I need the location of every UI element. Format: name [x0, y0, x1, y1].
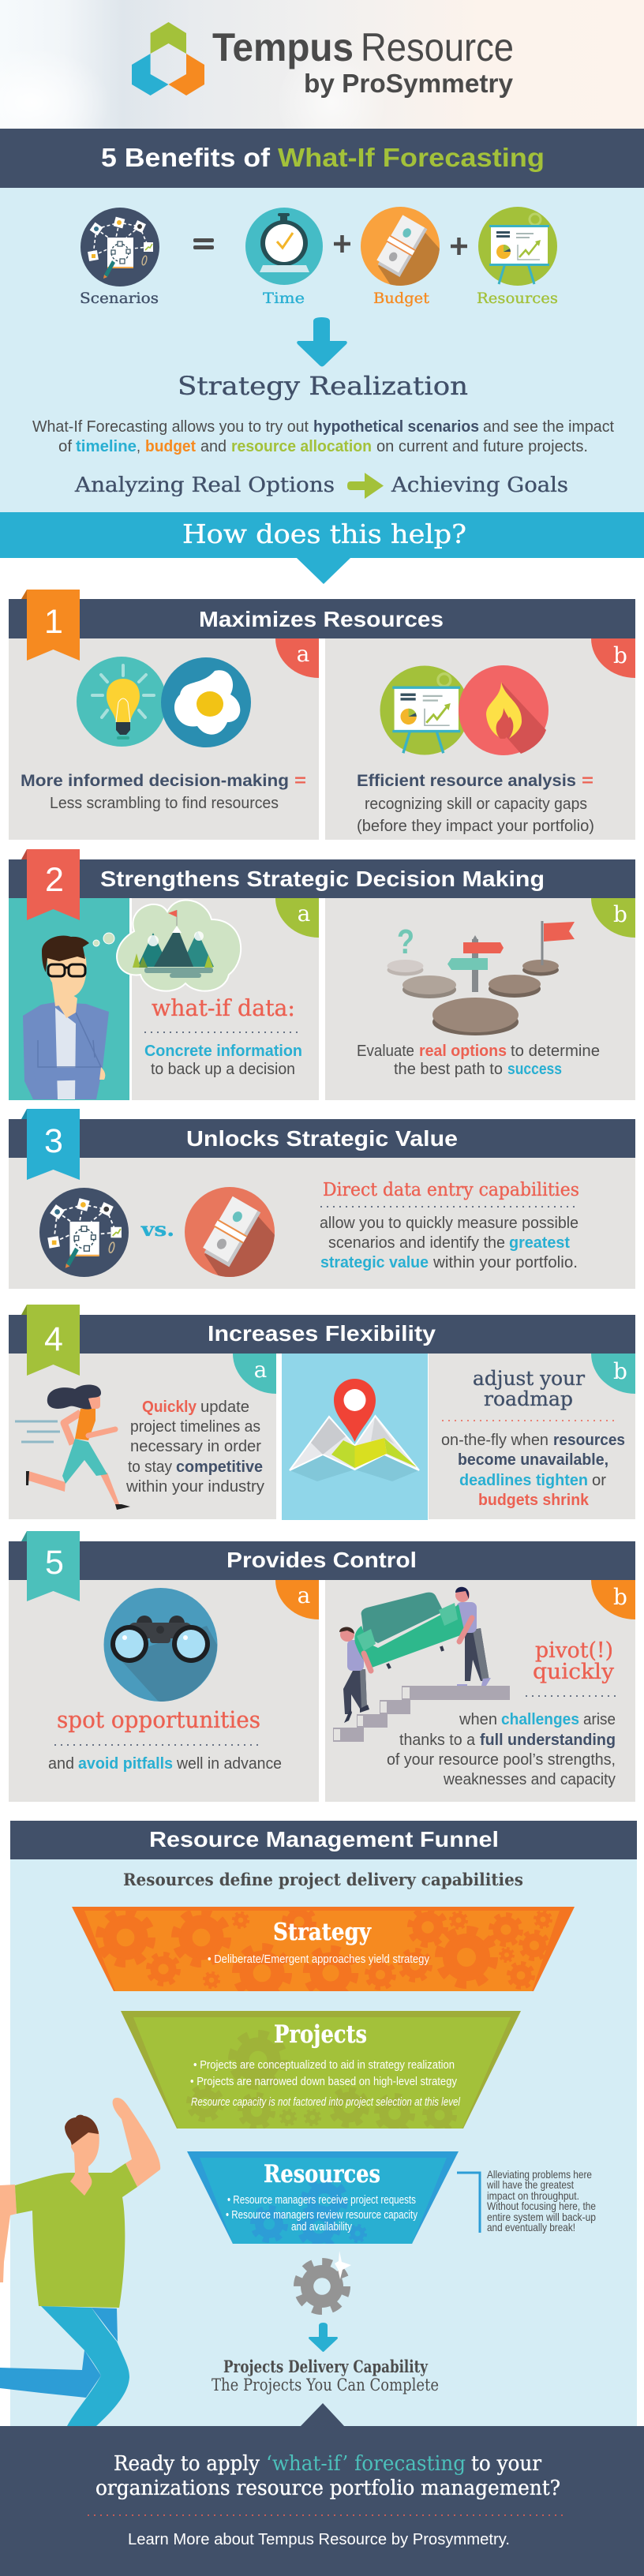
icon: fried egg	[161, 657, 251, 747]
callout: alleviating problems: Alleviating problems here	[487, 2168, 592, 2181]
icon: thought bubble with mountains	[93, 900, 241, 991]
callout: alleviating problems: will have the greatest	[486, 2178, 574, 2191]
text: panel b: full understanding	[480, 1732, 616, 1749]
label: vs: vs.	[140, 1218, 174, 1241]
section 5: provides control	[9, 1531, 635, 1802]
callout: alleviating problems: and eventually break!	[487, 2221, 575, 2233]
corner tag a	[275, 638, 319, 678]
text: panel a: to stay	[128, 1458, 172, 1476]
text: panel b: budgets shrink	[478, 1492, 590, 1509]
icon: gear with sparkle	[298, 2251, 351, 2311]
text: panel b: adjust your	[473, 1367, 585, 1390]
text: panel b: recognizing skill or capacity gaps	[365, 796, 587, 813]
banner: how does this help: How does this help?	[182, 519, 466, 549]
text: direct data entry: allow you to quickly measure possible	[320, 1215, 578, 1232]
text: panel a: spot opportunities	[57, 1706, 260, 1733]
panel a background	[9, 1354, 276, 1519]
ribbon number 3: 3	[44, 1122, 63, 1160]
funnel tier: projects: Projects	[274, 2020, 367, 2049]
funnel tier: resources: Resources	[264, 2160, 380, 2188]
text: what-if description: and see the impact	[483, 418, 614, 436]
callout: alleviating problems: Without focusing here, the	[487, 2200, 596, 2212]
panel background	[9, 1158, 635, 1289]
callout: alleviating problems: impact on throughput.	[487, 2189, 579, 2202]
section 4: increases flexibility	[9, 1305, 635, 1520]
ribbon number 4: 4	[44, 1320, 63, 1358]
text: what-if description: hypothetical scenarios	[313, 418, 479, 436]
text: panel a: More informed decision-making	[21, 772, 289, 790]
text: panel b: or	[592, 1472, 606, 1489]
section bar heading: Maximizes Resources	[199, 607, 444, 631]
arrow: green right	[347, 473, 384, 499]
corner tag a: a	[298, 1582, 310, 1608]
footer call to action	[0, 2403, 644, 2576]
section bar heading	[9, 1119, 635, 1158]
panel a background	[9, 638, 319, 840]
text: projects delivery capability: The Projects You Can Complete	[212, 2376, 439, 2394]
text: panel a: competitive	[176, 1458, 263, 1476]
panel background	[10, 1859, 637, 2428]
text: panel a: and	[48, 1755, 74, 1773]
section 2: strengthens strategic decision making	[9, 849, 635, 1100]
text: what-if data	[144, 994, 303, 1078]
text: panel b: the best path to	[394, 1061, 503, 1078]
corner tag b	[591, 1354, 635, 1394]
icon: light bulb	[77, 657, 167, 747]
icon: scenarios	[80, 208, 159, 286]
panel b background	[325, 638, 635, 840]
heading: strategy realization: Strategy Realization	[178, 371, 468, 401]
text: panel b: success	[507, 1061, 562, 1078]
text: panel a: within your industry	[125, 1478, 264, 1496]
text: what-if description: What-If Forecasting allows you to try out	[32, 418, 309, 436]
text: panel a: update	[200, 1398, 249, 1416]
formula labels: Resources	[477, 290, 558, 307]
text: what-if description: resource allocation	[231, 438, 372, 455]
corner tag b	[591, 1580, 635, 1619]
callout: alleviating problems	[457, 2168, 596, 2233]
funnel tier: resources: and availability	[291, 2220, 352, 2233]
funnel tier: resources	[187, 2151, 459, 2246]
section bar heading	[9, 1541, 635, 1580]
funnel tier: resources: • Resource managers receive project requests	[227, 2193, 416, 2207]
funnel tier: resources: • Resource managers review resource capacity	[226, 2208, 417, 2222]
icon: money stack for budget	[361, 207, 451, 298]
text: options to goals: Analyzing Real Options	[74, 474, 335, 497]
ribbon number 3	[21, 1109, 80, 1180]
section bar heading	[9, 599, 635, 638]
corner tag b: b	[613, 642, 627, 668]
corner tag a	[275, 898, 319, 938]
logo wordmark: Resource	[361, 25, 514, 69]
panel b background	[325, 1580, 635, 1802]
text: what-if description: timeline	[76, 438, 137, 455]
text: direct data entry: within your portfolio.	[432, 1254, 578, 1271]
icon: stepping stones and signpost: ?	[397, 923, 414, 961]
text: projects delivery capability: Projects Delivery Capability	[223, 2357, 429, 2376]
text: panel b: deadlines tighten	[459, 1472, 588, 1489]
section: resource management funnel	[0, 1821, 637, 2428]
section bar heading: Provides Control	[227, 1548, 417, 1572]
ribbon number 5	[21, 1531, 80, 1601]
section 1: maximizes resources	[9, 590, 635, 840]
icon: plus	[451, 238, 467, 255]
text: ready to apply: ‘what-if’ forecasting	[266, 2452, 466, 2476]
icon: flame	[459, 665, 549, 755]
icon: runner	[15, 1385, 130, 1510]
text: projects delivery capability	[212, 2357, 439, 2394]
text: panel b: become unavailable,	[458, 1451, 608, 1469]
funnel tier: projects	[121, 2011, 521, 2131]
text: options to goals	[74, 473, 568, 499]
section bar heading	[10, 1821, 637, 1859]
funnel tier: strategy	[72, 1907, 575, 1998]
banner: how does this help	[0, 512, 644, 584]
header background with logo	[0, 0, 644, 158]
corner tag a: a	[297, 641, 309, 667]
text: learn more link: Learn More about Tempus Resource by Prosymmetry.	[128, 2531, 510, 2548]
text: panel b	[357, 772, 594, 835]
corner tag b: b	[613, 1584, 627, 1610]
icon: stepping stones and signpost	[387, 921, 575, 1035]
text: direct data entry	[320, 1180, 579, 1271]
text: panel a: well in advance	[176, 1755, 282, 1773]
icon: equals sign	[193, 238, 214, 249]
text: panel b: roadmap	[484, 1387, 573, 1410]
text: what-if description: and	[200, 438, 227, 455]
panel b background	[429, 1354, 635, 1519]
icon: stopwatch for time	[245, 208, 323, 285]
text: what-if data: Concrete information	[144, 1043, 302, 1060]
text: panel a	[48, 1706, 282, 1773]
section bar heading: Resource Management Funnel	[149, 1827, 499, 1852]
text: panel b: when	[459, 1711, 497, 1728]
section bar heading	[9, 859, 635, 898]
icon: plus	[334, 235, 350, 253]
corner tag a: a	[298, 900, 310, 927]
callout: alleviating problems: entire system will back-up	[487, 2211, 596, 2223]
corner tag a: a	[254, 1357, 267, 1383]
funnel tier: strategy: • Deliberate/Emergent approaches yield strategy	[208, 1953, 429, 1966]
panel: what-if formula intro	[0, 188, 644, 512]
arrow: down to strategy realization	[297, 317, 347, 366]
panel b background	[325, 898, 635, 1100]
middle map panel background	[282, 1354, 428, 1520]
corner tag a	[233, 1354, 276, 1394]
text: direct data entry: scenarios and identify the	[328, 1234, 505, 1252]
icon: map with location pin	[290, 1379, 419, 1481]
arrow: down to delivery capability	[309, 2323, 338, 2352]
logo wordmark: by ProSymmetry	[304, 69, 514, 98]
text: what-if description: on current and future projects.	[376, 438, 588, 455]
funnel tier: strategy: Strategy	[273, 1919, 372, 1946]
text: panel b: =	[582, 772, 593, 790]
title bar: What-If Forecasting	[278, 143, 545, 172]
text: direct data entry: Direct data entry capabilities	[323, 1180, 579, 1200]
text: panel a: necessary in order	[130, 1438, 261, 1455]
formula labels	[80, 290, 558, 307]
ribbon number 1: 1	[44, 603, 63, 641]
icon: presentation board	[380, 666, 469, 754]
text: ready to apply: Ready to apply	[114, 2452, 260, 2476]
text: panel b	[441, 1367, 625, 1509]
ribbon number 5: 5	[45, 1544, 64, 1582]
funnel tier: projects: • Projects are conceptualized to aid in strategy realization	[193, 2058, 455, 2072]
corner tag b	[591, 898, 635, 938]
icon: presentation board for resources	[478, 207, 557, 286]
text: panel a	[21, 772, 306, 812]
text: what-if description: budget	[145, 438, 196, 455]
text: panel b	[357, 1043, 600, 1078]
icon: binoculars	[104, 1588, 218, 1702]
text: panel b: pivot(!)	[535, 1638, 613, 1663]
section bar heading	[9, 1315, 635, 1354]
icon: man thinking	[23, 936, 109, 1099]
formula labels: Budget	[373, 290, 429, 307]
ribbon number 2: 2	[45, 861, 64, 899]
section bar heading: Strengthens Strategic Decision Making	[100, 867, 545, 891]
formula labels: Time	[263, 290, 305, 307]
text: panel b: (before they impact your portfolio)	[357, 818, 594, 835]
corner tag b	[591, 638, 635, 678]
formula labels: Scenarios	[80, 290, 159, 307]
section bar heading: Unlocks Strategic Value	[186, 1126, 458, 1151]
corner tag b: b	[613, 1358, 627, 1384]
icon: scenarios	[39, 1188, 129, 1277]
text: panel b: of your resource pool’s strengths,	[387, 1751, 616, 1769]
text: what-if data: what-if data:	[152, 994, 295, 1021]
title bar: 5 Benefits of	[101, 143, 271, 172]
panel a background	[9, 1580, 319, 1802]
panel a background	[9, 898, 319, 1100]
text: panel a: Less scrambling to find resources	[50, 795, 279, 812]
logo wordmark: Tempus	[212, 25, 354, 69]
text: panel b: to determine	[511, 1043, 600, 1060]
title bar	[0, 129, 644, 188]
ribbon number 4	[21, 1305, 80, 1376]
text: panel b: Efficient resource analysis	[357, 772, 576, 790]
text: direct data entry: strategic value	[320, 1254, 429, 1271]
text: panel b: on-the-fly when	[441, 1432, 549, 1449]
text: what-if description	[32, 418, 614, 455]
text: what-if data: to back up a decision	[151, 1061, 295, 1078]
ribbon number 1	[21, 590, 80, 661]
text: ready to apply: organizations resource portfolio management?	[95, 2477, 560, 2500]
text: what-if description: ,	[137, 438, 140, 455]
text: options to goals: Achieving Goals	[391, 474, 568, 497]
text: panel b: real options	[419, 1043, 507, 1060]
corner tag b: b	[613, 901, 627, 927]
section bar heading: Increases Flexibility	[208, 1321, 436, 1346]
icon: Tempus logo mark	[132, 22, 204, 95]
text: direct data entry: greatest	[509, 1234, 570, 1252]
text: panel b: quickly	[533, 1660, 615, 1684]
funnel tier: projects: Resource capacity is not factored into project selection at this level	[191, 2095, 461, 2109]
text: panel a: Quickly	[142, 1398, 197, 1416]
icon: money stack	[185, 1187, 288, 1290]
text: panel b: challenges	[501, 1711, 579, 1728]
text: panel a: =	[294, 772, 306, 790]
text: panel a: avoid pitfalls	[78, 1755, 173, 1773]
icon: cheering man	[0, 2098, 160, 2426]
text: panel a: project timelines as	[130, 1418, 260, 1436]
text: ready to apply: to your	[471, 2452, 542, 2476]
text: panel b: Evaluate	[357, 1043, 414, 1060]
subheading: Resources define project delivery capabilities	[123, 1870, 523, 1889]
ribbon number 2	[21, 849, 80, 920]
logo wordmark	[212, 25, 514, 98]
text: panel b	[387, 1638, 616, 1788]
text: panel b: weaknesses and capacity	[443, 1771, 616, 1788]
text: panel b: thanks to a	[399, 1732, 476, 1749]
text: panel b: arise	[583, 1711, 616, 1728]
icon: people carrying sofa up stairs	[333, 1587, 510, 1742]
text: panel a	[125, 1398, 264, 1496]
text: what-if description: of	[58, 438, 72, 455]
section 3: unlocks strategic value	[9, 1109, 635, 1290]
text: ready to apply	[95, 2452, 560, 2500]
corner tag a	[275, 1580, 319, 1619]
text: panel b: resources	[553, 1432, 625, 1449]
funnel tier: projects: • Projects are narrowed down based on high-level strategy	[190, 2075, 457, 2088]
